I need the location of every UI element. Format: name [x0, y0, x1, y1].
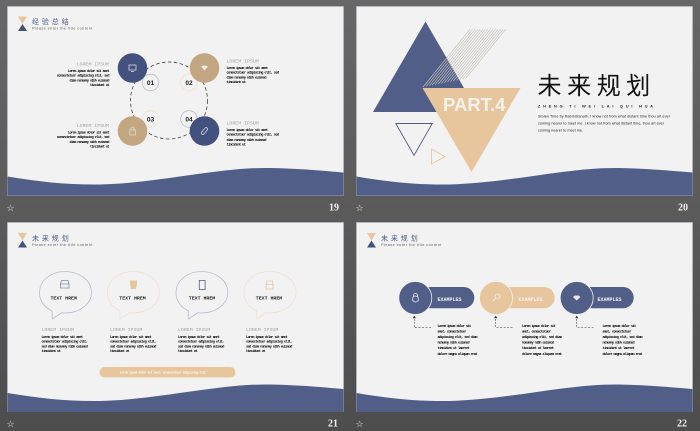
speech bubble 3: TEXT HREM — [189, 296, 215, 302]
subheading: Please enter the title content — [32, 26, 93, 30]
slide 22 wave — [356, 384, 692, 412]
text block: bottom right: consectetuer adipiscing elit, sed — [226, 132, 279, 138]
icon: star 19: ☆ — [6, 204, 15, 214]
speech bubble 1: TEXT HREM — [50, 296, 77, 302]
subtitle: ZHENG TI WEI LAI QUI HUA — [538, 104, 653, 108]
slide 22 background — [356, 222, 692, 412]
speech bubble 2 — [108, 272, 160, 319]
node 04: 04 — [185, 116, 193, 124]
icon: star 22: ☆ — [356, 420, 364, 430]
icon circle: lock — [118, 116, 147, 146]
slide 21 background — [8, 222, 344, 412]
page number 22: 22 — [677, 418, 687, 430]
text block: bottom right: diam nonummy nibh euismod — [226, 138, 266, 143]
page number 21: 21 — [328, 418, 338, 430]
body text — [538, 114, 671, 132]
text block 2: amet, consectetuer — [522, 330, 551, 334]
text block: top left: diam nonummy nibh euismod — [69, 78, 109, 84]
heading: 未来规划 — [381, 234, 421, 242]
text block: top left: tincidunt ut — [90, 83, 109, 88]
page number 19: 19 — [329, 202, 339, 214]
text column 1 — [42, 327, 88, 354]
text column 2: sed diam nonummy nibh euismod — [110, 344, 156, 350]
text block 2: Lorem ipsum dolor sit — [522, 324, 556, 329]
text block: bottom left: diam nonummy nibh euismod — [69, 140, 109, 145]
summary pill — [100, 367, 236, 378]
navy triangle — [373, 22, 478, 112]
panel: slide 20 — [356, 6, 692, 196]
speech bubble 4 — [244, 272, 296, 319]
text block: bottom right: tincidunt ut — [226, 142, 246, 148]
speech bubble 4: TEXT HREM — [256, 296, 282, 302]
slide 21 wave — [8, 384, 344, 412]
text block 3: Lorem ipsum dolor sit — [602, 324, 636, 329]
icon circle: monitor — [118, 53, 147, 83]
text column 4: Lorem ipsum dolor sit amet — [246, 335, 288, 340]
badge 1: lock — [399, 282, 474, 314]
text block 1: Lorem ipsum dolor sit — [438, 324, 471, 329]
text column 2: Lorem ipsum dolor sit amet — [110, 335, 152, 340]
slide 19 background — [8, 6, 344, 196]
text block 3: amet, consectetuer — [602, 330, 631, 334]
text block 3: nonummy nibh euismod — [602, 340, 635, 346]
text column 4: sed diam nonummy nibh euismod — [246, 344, 292, 350]
arrow 3 — [576, 316, 595, 328]
text block: top left: LOREM IPSUM — [77, 62, 109, 68]
text block: top right — [226, 58, 279, 85]
diagonal stripes — [423, 29, 506, 87]
node 03 — [142, 111, 159, 127]
text block: bottom right: Lorem ipsum dolor sit amet — [226, 128, 268, 133]
text column 3: sed diam nonummy nibh euismod — [178, 344, 224, 350]
badge 2: search: EXAMPLES — [518, 297, 543, 303]
text block: bottom left — [57, 123, 109, 150]
text block: top right: diam nonummy nibh euismod — [226, 76, 266, 80]
arrow 2 — [494, 316, 514, 328]
text block: top right: LOREM IPSUM — [226, 58, 259, 64]
node 01: 01 — [147, 80, 154, 87]
text column 3: tincidunt ut — [178, 349, 197, 354]
icon circle: wifi — [190, 53, 219, 83]
arrow 1 — [413, 316, 432, 328]
text block: bottom left: consectetuer adipiscing elit, sed — [57, 135, 109, 140]
node 02: 02 — [185, 80, 193, 87]
tan triangle — [422, 88, 520, 172]
text column 4 — [246, 327, 292, 354]
text block: top right: tincidunt ut — [226, 80, 246, 85]
text block 1: dolore magna aliquam erat — [438, 352, 477, 357]
badge 1: lock: EXAMPLES — [438, 297, 462, 303]
node 04 — [181, 111, 197, 127]
summary pill: Lorem ipsum dolor sit amet, consectetuer adipiscing elit — [120, 371, 206, 375]
text column 1: Lorem ipsum dolor sit amet — [42, 335, 83, 340]
icon: hourglass logo — [18, 233, 27, 248]
panel: slide 22 — [356, 222, 692, 412]
part label: PART.4 — [443, 94, 506, 115]
text block 1: amet, consectetuer — [438, 330, 466, 334]
text block: bottom right: LOREM IPSUM — [226, 120, 259, 126]
text column 1: sed diam nonummy nibh euismod — [42, 344, 88, 350]
text column 4: consectetuer adipiscing elit, — [246, 340, 292, 344]
speech bubble 1 — [40, 272, 92, 319]
icon: hourglass logo — [18, 16, 27, 31]
text block 2 — [522, 324, 562, 357]
text block: bottom right — [226, 120, 279, 148]
panel: slide 19 — [8, 6, 344, 196]
text block: bottom left: LOREM IPSUM — [77, 123, 109, 129]
text column 4: LOREM IPSUM — [246, 327, 278, 333]
body text: Stolen Time by Rabindranath. I know not from what distant time thou art ever — [538, 114, 671, 118]
text column 3: consectetuer adipiscing elit, — [178, 340, 224, 344]
subheading: Please enter the title content — [32, 242, 93, 247]
text block: top left — [57, 62, 109, 88]
text block 2: tincidunt ut laoreet — [522, 346, 554, 351]
text block 3: tincidunt ut laoreet — [602, 346, 635, 351]
text block: bottom left: Lorem ipsum dolor sit amet — [68, 130, 109, 136]
panel: slide 21 — [8, 222, 344, 412]
icon: hourglass logo — [367, 233, 376, 248]
text column 3 — [178, 327, 224, 354]
outline triangle — [396, 124, 432, 155]
heading: 经验总结 — [32, 17, 72, 26]
node 03: 03 — [147, 116, 154, 124]
text column 4: tincidunt ut — [246, 349, 265, 354]
text block 1: nonummy nibh euismod — [438, 340, 470, 346]
title: 未来规划 — [538, 73, 656, 100]
text column 2: LOREM IPSUM — [110, 327, 142, 333]
text block: top left: consectetuer adipiscing elit, sed — [57, 74, 109, 78]
badge 3: diamond: EXAMPLES — [598, 297, 622, 303]
text block 3: adipiscing elit, sed diam — [602, 335, 642, 340]
icon: star 21: ☆ — [6, 420, 15, 430]
slide 19 wave — [8, 168, 344, 196]
heading: 未来规划 — [32, 234, 72, 242]
node 02 — [181, 74, 197, 91]
text column 2: tincidunt ut — [110, 349, 129, 354]
text column 2: consectetuer adipiscing elit, — [110, 340, 156, 344]
text block 1: adipiscing elit, sed diam — [438, 335, 477, 340]
text column 1: consectetuer adipiscing elit, — [42, 340, 88, 344]
text column 3: LOREM IPSUM — [178, 327, 210, 333]
text block 1: tincidunt ut laoreet — [438, 346, 470, 351]
text column 1: tincidunt ut — [42, 349, 61, 354]
text block 2: nonummy nibh euismod — [522, 340, 554, 346]
node 01 — [142, 74, 159, 91]
speech bubble 3 — [176, 272, 228, 319]
text block 3: dolore magna aliquam erat — [602, 352, 642, 357]
text column 3: Lorem ipsum dolor sit amet — [178, 335, 220, 340]
speech bubble 2: TEXT HREM — [119, 296, 146, 302]
badge 3: diamond — [560, 282, 634, 314]
text block: top right: consectetuer adipiscing elit, sed — [226, 70, 279, 76]
text column 2 — [110, 327, 156, 354]
text block 3 — [602, 324, 642, 357]
subheading: Please enter the title content — [381, 242, 442, 247]
icon: star 20: ☆ — [356, 204, 364, 214]
body text: coming nearer to meet me. — [538, 128, 583, 132]
dashed ring — [130, 62, 208, 139]
text block 2: adipiscing elit, sed diam — [522, 335, 562, 340]
text block 1 — [438, 324, 477, 357]
text block: top right: Lorem ipsum dolor sit amet — [226, 66, 268, 71]
text block 2: dolore magna aliquam erat — [522, 352, 562, 357]
badge 2: search — [480, 282, 555, 314]
slide 20 background — [356, 6, 692, 196]
page number 20: 20 — [678, 202, 688, 214]
body text: coming nearer to meet me. I know not from what distant time, thou art ever — [538, 122, 665, 126]
icon circle: paperclip — [190, 116, 219, 146]
small outline triangle — [432, 149, 445, 164]
text column 1: LOREM IPSUM — [42, 327, 74, 333]
text block: bottom left: tincidunt ut — [90, 144, 109, 150]
slide 20 wave — [356, 168, 692, 196]
text block: top left: Lorem ipsum dolor sit amet — [68, 69, 109, 74]
